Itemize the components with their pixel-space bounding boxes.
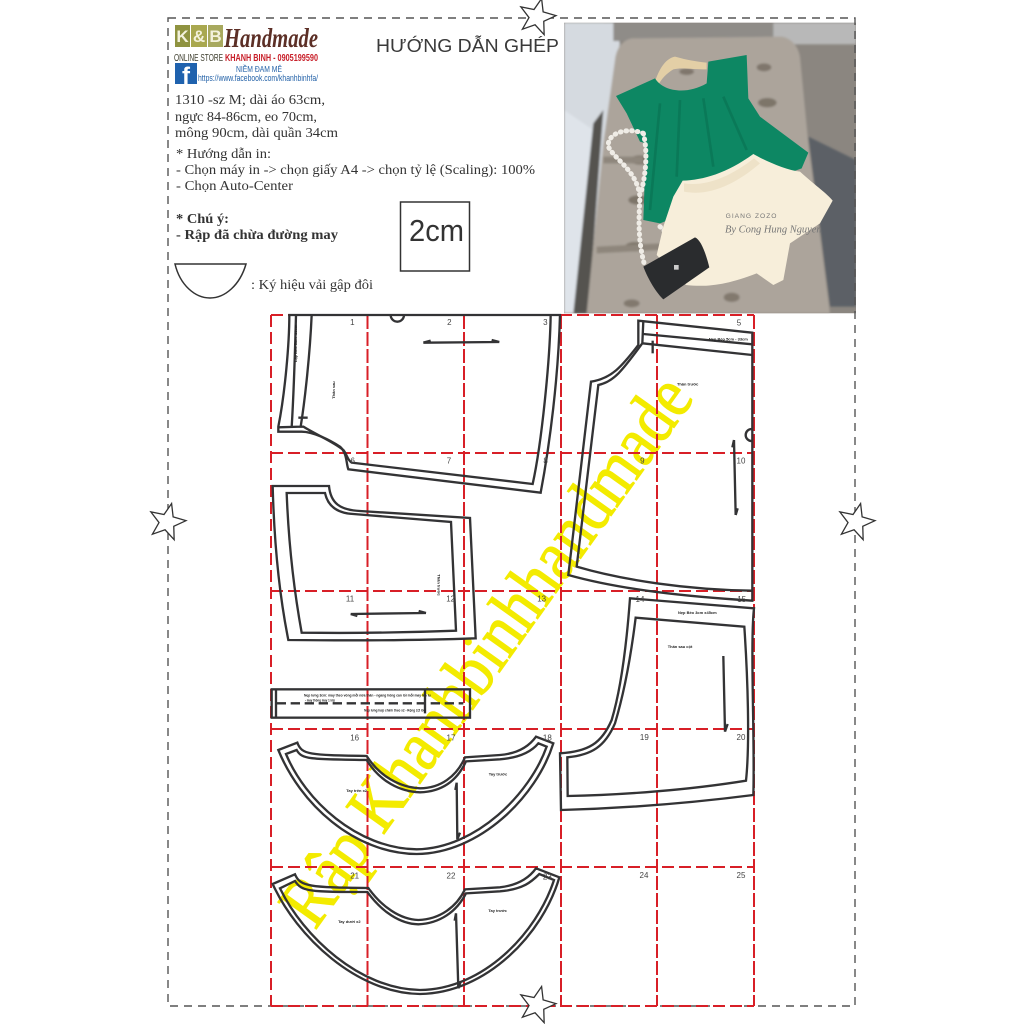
- legend text: fold symbol: : Ký hiệu vải gập đôi: [251, 278, 373, 293]
- logo: K&B Handmade: [174, 23, 318, 90]
- scale box: 2cm: [400, 202, 470, 271]
- icon: fold symbol: [175, 264, 246, 298]
- pattern piece: shorts front: 9: [640, 456, 645, 465]
- text block: print instructions: * Hướng dẫn in:: [176, 147, 271, 162]
- pattern piece: front top body: 6: [350, 456, 355, 465]
- pattern piece: shorts front: 10: [737, 456, 746, 465]
- red tile grid: [271, 315, 754, 1006]
- pattern piece: shorts back: 14: [636, 595, 645, 604]
- photo watermark: GIANG ZOZO: [726, 213, 777, 220]
- logo: K&B Handmade: K: [176, 27, 189, 46]
- icon: top star: [516, 0, 559, 36]
- hanger: [655, 57, 707, 85]
- pattern piece: upper sleeve: 18: [543, 733, 552, 742]
- pattern piece: waistband strip: [272, 689, 470, 718]
- tile numbers 24 and 25: [640, 871, 746, 880]
- logo: K&B Handmade: B: [209, 27, 222, 46]
- green top: [616, 55, 808, 223]
- text block: note: [176, 212, 338, 243]
- pattern piece: shorts back: 19: [640, 733, 649, 742]
- text block: print instructions: - Chọn Auto-Center: [176, 179, 293, 194]
- tile numbers 24 and 25: 25: [737, 871, 746, 880]
- pattern piece: upper sleeve: Tay trên x2: [346, 788, 368, 793]
- text block: size measurements: [175, 93, 338, 141]
- pattern piece: shorts front: Thân trước: [677, 382, 699, 387]
- pattern piece: front top body: Thân sau: [331, 381, 336, 399]
- text block: note: * Chú ý:: [176, 212, 229, 227]
- pattern piece: upper sleeve: Tay trước: [489, 772, 508, 777]
- photo: green top and cream shorts on tufted bench: [564, 23, 856, 313]
- pattern sheet: [149, 0, 877, 1024]
- watermark: Rập Khanhbinhhandmade: [263, 361, 708, 940]
- pattern piece: waistband strip: Nẹp lưng hợp chỉnh theo x2 - Rộng 3,5 lớp: [364, 708, 426, 713]
- logo: K&B Handmade: &: [193, 27, 205, 46]
- pattern piece: lower sleeve: [273, 868, 559, 994]
- logo: K&B Handmade: f: [182, 63, 191, 90]
- pattern piece: front top body: [278, 315, 560, 493]
- photo watermark: By Cong Hung Nguyen: [725, 225, 822, 236]
- pattern piece: front top body: 2: [447, 318, 452, 327]
- text block: print instructions: [176, 147, 535, 194]
- pattern piece: back top body: 12: [446, 595, 456, 604]
- pattern piece: upper sleeve: 17: [447, 733, 456, 742]
- pattern piece: shorts front: [568, 318, 752, 601]
- pattern piece: shorts back: 20: [737, 733, 746, 742]
- pattern piece: shorts back: 15: [737, 595, 747, 604]
- icon: left star: [146, 499, 189, 541]
- photo watermark: [725, 213, 822, 236]
- pattern piece: waistband strip: Nẹp lưng 3cm: may theo vòng mỗi nửa thân - ngang hông can lối mỗi may lên lu: [304, 693, 431, 698]
- pattern piece: shorts front: Nẹp Bèo 5cm - 33cm: [709, 336, 748, 341]
- pattern piece: front top body: 8: [543, 456, 548, 465]
- logo: K&B Handmade: Handmade: [223, 23, 318, 53]
- scale box: 2cm: 2cm: [409, 213, 464, 248]
- logo: K&B Handmade: KHANH BINH - 0905199590: [225, 52, 318, 64]
- logo: K&B Handmade: ONLINE STORE: [174, 52, 223, 64]
- pattern piece: back top body: 13: [537, 595, 547, 604]
- pattern piece: front top body: Lập Bèo 5cm -33cm: [293, 324, 298, 362]
- text block: size measurements: mông 90cm, dài quần 34cm: [175, 126, 338, 141]
- pattern piece: front top body: 3: [543, 318, 548, 327]
- pattern piece: lower sleeve: 23: [543, 872, 552, 881]
- pattern piece: upper sleeve: [278, 733, 553, 854]
- pattern piece: front top body: 7: [447, 456, 452, 465]
- logo: K&B Handmade: NIỀM ĐAM MÊ: [236, 64, 282, 74]
- pattern piece: shorts back: Nẹp Bèo 3cm x45cm: [678, 610, 717, 615]
- pattern piece: upper sleeve: 16: [350, 733, 360, 742]
- pattern piece: shorts back: [560, 595, 754, 810]
- pattern piece: lower sleeve: Tay trước: [488, 908, 508, 913]
- outer dashed page border: [168, 18, 855, 1006]
- title: HƯỚNG DẪN GHÉP: [376, 35, 559, 56]
- pattern piece: lower sleeve: Tay dưới x2: [338, 919, 361, 924]
- pattern piece: shorts front: 5: [737, 318, 742, 327]
- pattern piece: back top body: [273, 486, 547, 640]
- pattern piece: shorts back: Thân sau cột: [668, 644, 693, 649]
- pattern piece: back top body: 11: [346, 595, 355, 604]
- pearl necklace: [606, 128, 663, 265]
- pattern piece: waistband strip: - may thông may 1 lớp: [305, 697, 335, 702]
- pattern piece: lower sleeve: 22: [447, 872, 456, 881]
- tile numbers 24 and 25: 24: [640, 871, 649, 880]
- text block: note: - Rập đã chừa đường may: [176, 228, 338, 243]
- icon: bottom star: [516, 982, 559, 1024]
- text block: size measurements: ngực 84-86cm, eo 70cm,: [175, 110, 317, 125]
- logo: K&B Handmade: https://www.facebook.com/khanhbinhfa/: [198, 73, 318, 84]
- text block: print instructions: - Chọn máy in -> chọn giấy A4 -> chọn tỷ lệ (Scaling): 100%: [176, 163, 535, 178]
- pattern piece: lower sleeve: 21: [350, 872, 360, 881]
- pattern piece: back top body: Thân trước: [436, 574, 441, 596]
- black bag: [643, 237, 709, 299]
- icon: right star: [835, 499, 878, 541]
- pattern piece: front top body: 1: [350, 318, 355, 327]
- text block: size measurements: 1310 -sz M; dài áo 63cm,: [175, 93, 325, 108]
- cream shorts: [657, 154, 833, 286]
